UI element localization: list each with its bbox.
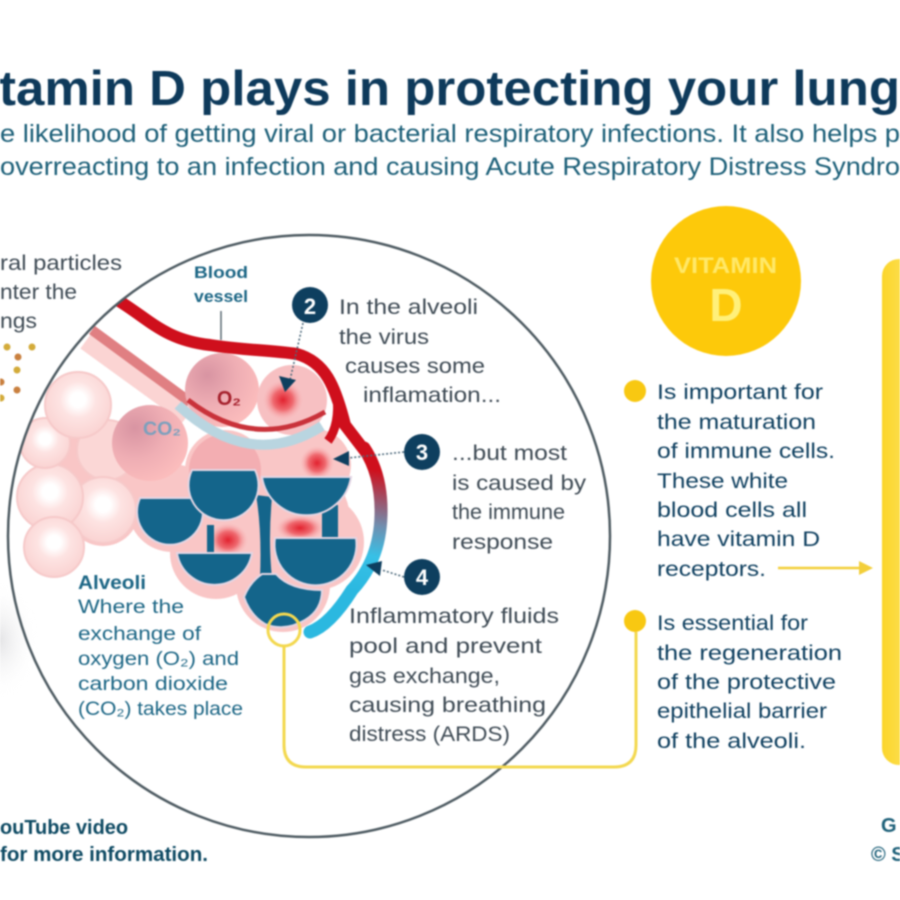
blood vessel label: Blood xyxy=(194,263,248,282)
step 3 text xyxy=(452,442,587,554)
step 4 marker xyxy=(366,559,440,595)
vessel branch xyxy=(328,395,338,441)
step 3 marker xyxy=(333,434,440,470)
step 3 text: response xyxy=(452,531,553,554)
step 4 text xyxy=(349,605,559,746)
bullet: immune cells xyxy=(624,380,835,581)
alveoli description: exchange of xyxy=(78,624,202,645)
vitamin D badge xyxy=(651,206,801,356)
bullet: immune cells: Is important for xyxy=(657,381,823,404)
bullet: immune cells: receptors. xyxy=(657,558,766,581)
step 2 text: In the alveoli xyxy=(339,296,478,319)
footer right xyxy=(871,815,900,866)
fluid-filled vessel xyxy=(310,448,381,632)
healthy alveoli cluster xyxy=(17,372,137,577)
blood vessel leader line xyxy=(220,311,222,340)
footer left xyxy=(0,817,208,866)
blood vessel label: vessel xyxy=(194,287,248,306)
magnifier circle outline xyxy=(8,235,610,837)
step 3 text: ...but most xyxy=(452,442,567,465)
alveoli description xyxy=(78,573,243,720)
title: tamin D plays in protecting your lung xyxy=(0,62,900,116)
alveoli description: carbon dioxide xyxy=(78,674,228,695)
viral particles label xyxy=(0,252,122,333)
step 4 text: pool and prevent xyxy=(349,635,542,658)
blood vessel red xyxy=(119,301,368,455)
alveoli description: (CO₂) takes place xyxy=(78,699,243,720)
lower alveoli highlights xyxy=(189,434,334,557)
step 3 text: is caused by xyxy=(452,472,587,495)
alveoli backing tissue xyxy=(60,430,364,632)
step 4 text: Inflammatory fluids xyxy=(349,605,559,628)
subtitle xyxy=(0,120,900,181)
viral particles label: ral particles xyxy=(0,252,122,275)
alveoli description: oxygen (O₂) and xyxy=(78,649,239,670)
bullet: immune cells: have vitamin D xyxy=(657,528,820,551)
step 3 marker: 3 xyxy=(416,440,428,465)
alveolus CO2 label: CO₂ xyxy=(143,419,181,440)
footer left: for more information. xyxy=(0,844,208,866)
bullet: epithelial barrier: of the alveoli. xyxy=(657,730,806,753)
alveolus O2 label: O₂ xyxy=(217,388,241,410)
yellow connector from alveolus to vitamin D point xyxy=(268,614,636,767)
subtitle: e likelihood of getting viral or bacterial respiratory infections. It also helps p xyxy=(0,120,900,148)
alveolus inflamed top xyxy=(257,365,327,435)
yellow panel xyxy=(882,259,900,765)
arrow to panel xyxy=(778,561,873,575)
blood vessel label xyxy=(194,263,248,306)
step 2 marker: 2 xyxy=(304,294,316,319)
step 2 marker xyxy=(279,287,328,392)
subtitle: overreacting to an infection and causing Acute Respiratory Distress Syndro xyxy=(0,153,900,181)
teal fluid bowls xyxy=(137,470,357,627)
alveolus O2 xyxy=(185,353,259,427)
magnified alveoli illustration xyxy=(17,301,381,632)
vitamin D badge: VITAMIN xyxy=(674,253,777,278)
step 4 marker: 4 xyxy=(416,565,429,590)
viral particle dots xyxy=(0,344,36,402)
step 2 text: causes some xyxy=(345,355,485,378)
step 2 text xyxy=(339,296,501,407)
bullet: epithelial barrier: of the protective xyxy=(657,671,836,694)
alveoli description: Where the xyxy=(78,597,184,618)
alveoli description: Alveoli xyxy=(78,573,146,594)
step 4 text: distress (ARDS) xyxy=(349,723,510,746)
bullet: epithelial barrier: epithelial barrier xyxy=(657,700,827,723)
bullet: epithelial barrier xyxy=(624,610,842,753)
bullet: epithelial barrier: Is essential for xyxy=(657,612,808,635)
step 2 text: inflamation... xyxy=(363,384,501,407)
step 2 text: the virus xyxy=(339,326,429,349)
step 4 text: causing breathing xyxy=(349,694,546,717)
bullet: immune cells: of immune cells. xyxy=(657,440,835,463)
capillary blue xyxy=(178,405,322,445)
bullet: immune cells: These white xyxy=(657,470,788,493)
vitamin D badge: D xyxy=(709,279,743,331)
footer right: G xyxy=(881,815,897,837)
bullet: immune cells: blood cells all xyxy=(657,499,807,522)
viral particles label: ngs xyxy=(0,310,37,333)
step 3 text: the immune xyxy=(452,501,565,524)
footer left: ouTube video xyxy=(0,817,128,839)
lung shadow xyxy=(0,580,38,700)
capillary thin red xyxy=(188,400,325,429)
bullet: epithelial barrier: the regeneration xyxy=(657,642,842,665)
step 4 text: gas exchange, xyxy=(349,665,500,688)
viral particles label: nter the xyxy=(0,281,77,304)
airway xyxy=(88,330,190,412)
alveolus CO2 xyxy=(112,405,188,481)
bullet: immune cells: the maturation xyxy=(657,411,816,434)
